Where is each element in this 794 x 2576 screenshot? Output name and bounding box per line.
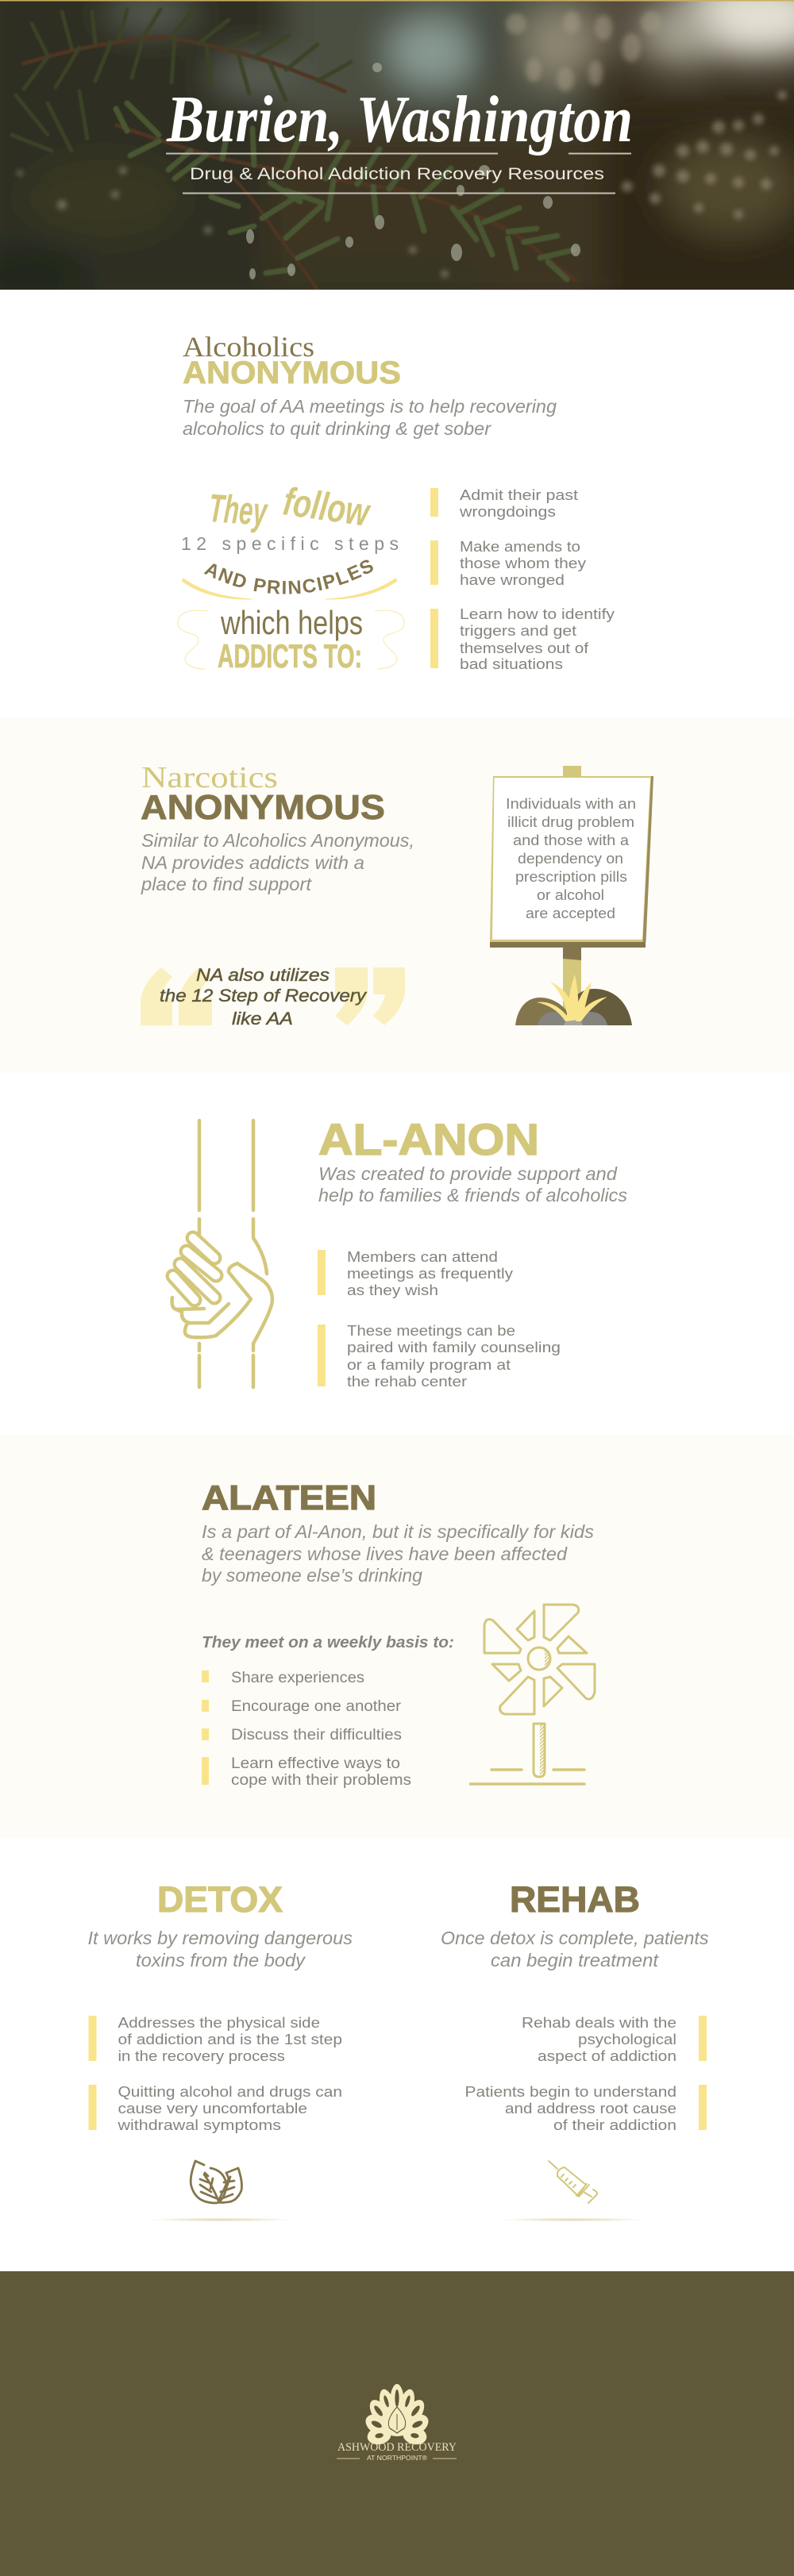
panel: al-anon (172, 1114, 627, 1390)
item text: These meetings can be (347, 1322, 515, 1339)
item text: of addiction and is the 1st step (118, 2031, 342, 2047)
heading: rehab: REHAB (510, 1879, 640, 1920)
subtitle: Drug & Alcohol Addiction Recovery Resources (190, 165, 604, 183)
icon: lotus (364, 2384, 430, 2446)
item text: Members can attend (347, 1248, 498, 1265)
heading: narcotics anonymous (141, 761, 385, 827)
intro text: place to find support (141, 874, 313, 894)
heading: alcoholics anonymous: Alcoholics (183, 331, 314, 363)
intro text (318, 1163, 627, 1205)
item text (465, 2014, 676, 2133)
item text: Encourage one another (231, 1698, 402, 1715)
bar markers (699, 2016, 707, 2130)
item text: aspect of addiction (538, 2047, 676, 2064)
sign text: and those with a (513, 832, 630, 848)
sign board (490, 776, 653, 942)
grass (537, 975, 607, 1021)
sign text: Individuals with an (506, 795, 636, 812)
quote marks (141, 967, 405, 1025)
bar markers (430, 488, 438, 668)
heading: alcoholics anonymous (183, 331, 401, 390)
item text: Share experiences (231, 1670, 364, 1686)
item text: meetings as frequently (347, 1265, 514, 1282)
squiggle brackets (178, 610, 404, 669)
wordmark: ASHWOOD RECOVERY (337, 2441, 457, 2454)
heading: alcoholics anonymous: ANONYMOUS (183, 356, 401, 390)
section background: footer (0, 2271, 794, 2576)
intro text (183, 396, 557, 439)
item text: of their addiction (553, 2117, 676, 2133)
sign text: dependency on (518, 850, 623, 867)
item text: Rehab deals with the (522, 2014, 676, 2031)
header background photo (0, 0, 794, 317)
icon shadow (148, 2217, 295, 2222)
item text (231, 1670, 411, 1789)
bar markers (89, 2016, 97, 2130)
intro text (202, 1521, 595, 1586)
item text: have wronged (460, 571, 565, 588)
lower hand (185, 1263, 272, 1351)
script words (207, 479, 374, 535)
intro text: alcoholics to quit drinking & get sober (183, 418, 491, 439)
curved text (203, 568, 378, 594)
intro text: Similar to Alcoholics Anonymous, (141, 830, 414, 851)
pinwheel blades (544, 1605, 579, 1640)
icon: syringe (549, 2161, 597, 2203)
list: what members do (430, 486, 615, 672)
item text: Learn how to identify (460, 606, 615, 622)
sign text: prescription pills (515, 868, 627, 885)
heading: narcotics anonymous: Narcotics (141, 761, 278, 794)
pinwheel stem (534, 1724, 545, 1777)
item text: bad situations (460, 656, 563, 672)
item text (117, 2014, 342, 2133)
mounds (515, 998, 573, 1025)
subheading: They meet on a weekly basis to: (202, 1634, 454, 1651)
callout: quote (141, 965, 405, 1028)
script words: They (207, 486, 269, 534)
smile swoosh (182, 579, 397, 599)
list: meeting facts (318, 1248, 561, 1390)
sign text (506, 795, 636, 921)
bar markers (202, 1671, 209, 1785)
item text: psychological (578, 2031, 676, 2047)
intro text: NA provides addicts with a (141, 852, 364, 873)
section background: al-anon (0, 1073, 794, 1435)
sign text: illicit drug problem (507, 813, 634, 830)
water droplets (246, 63, 580, 279)
intro text: can begin treatment (491, 1950, 660, 1970)
item text: Make amends to (460, 538, 580, 555)
intro text (441, 1928, 709, 1970)
item text: themselves out of (460, 640, 589, 656)
section background: alateen (0, 1435, 794, 1838)
header: photo banner with title (0, 0, 794, 317)
item text: those whom they (460, 555, 587, 571)
intro text (141, 830, 414, 894)
intro text (87, 1928, 353, 1970)
sign text: or alcohol (537, 886, 604, 903)
quote text: NA also utilizes (196, 965, 330, 985)
item text: and address root cause (505, 2100, 676, 2117)
heading: alateen: ALATEEN (202, 1478, 376, 1517)
footer logo: ashwood recovery (337, 2384, 457, 2462)
heading: al-anon: AL-ANON (318, 1114, 539, 1164)
script words: follow (280, 479, 374, 535)
title rule (166, 154, 631, 194)
divider (396, 1885, 399, 2131)
item text: wrongdoings (459, 503, 556, 520)
branches (12, 8, 576, 290)
rocks (538, 1012, 572, 1025)
icon shadow (499, 2217, 647, 2222)
intro text: & teenagers whose lives have been affected (202, 1544, 568, 1564)
list: weekly goals (202, 1670, 411, 1789)
heading: detox: DETOX (157, 1879, 283, 1920)
item text: Learn effective ways to (231, 1755, 400, 1772)
item text: withdrawal symptoms (117, 2117, 281, 2133)
intro text: Once detox is complete, patients (441, 1928, 709, 1948)
ground lines (470, 1770, 584, 1784)
panel: detox and rehab (87, 1879, 709, 2222)
post (563, 766, 581, 1025)
gripping fingers (173, 1238, 216, 1300)
panel: narcotics anonymous (141, 761, 653, 1028)
bar markers (318, 1250, 326, 1386)
item text: as they wish (347, 1282, 438, 1298)
quote text: the 12 Step of Recovery (160, 986, 368, 1005)
quote text: like AA (232, 1009, 293, 1028)
intro text: help to families & friends of alcoholics (318, 1185, 627, 1205)
item text: triggers and get (460, 622, 576, 639)
item text (347, 1248, 561, 1390)
column: rehab (441, 1879, 709, 2222)
gold top edge (0, 0, 794, 2)
panel: alateen (202, 1478, 595, 1789)
illustration: pinwheel (470, 1605, 595, 1784)
illustration: helping hands (172, 1121, 272, 1387)
which helps addicts to: which helps (220, 604, 363, 641)
main title: Burien, Washington (166, 83, 633, 156)
item text: or a family program at (347, 1356, 511, 1373)
section background: alcoholics anonymous (0, 290, 794, 717)
intro text: It works by removing dangerous (87, 1928, 353, 1948)
typographic lockup: they follow 12 specific steps (178, 479, 405, 675)
section background: detox and rehab (0, 1838, 794, 2271)
panel: alcoholics anonymous (178, 331, 615, 675)
sign text: are accepted (526, 905, 615, 921)
intro text: Is a part of Al-Anon, but it is specifically for kids (202, 1521, 595, 1542)
item text: Addresses the physical side (118, 2014, 320, 2031)
typographic lockup: they follow 12 specific steps: ADDICTS TO: (218, 637, 362, 675)
item text: in the recovery process (118, 2047, 285, 2064)
item text: Quitting alcohol and drugs can (118, 2083, 342, 2100)
item text: cause very uncomfortable (118, 2100, 307, 2117)
intro text: The goal of AA meetings is to help recovering (183, 396, 557, 417)
rope lines (199, 1121, 267, 1387)
item text: Patients begin to understand (465, 2083, 676, 2100)
pinwheel hub (528, 1647, 550, 1670)
intro text: Was created to provide support and (318, 1163, 618, 1184)
intro text: toxins from the body (136, 1950, 306, 1970)
lotus leaf cutouts (371, 2390, 423, 2439)
illustration: sign post (490, 766, 653, 1025)
item text: Discuss their difficulties (231, 1727, 402, 1744)
heading: narcotics anonymous: ANONYMOUS (141, 788, 385, 827)
item text: the rehab center (347, 1373, 467, 1390)
typographic lockup: they follow 12 specific steps: AND PRINCIPLES (203, 560, 373, 594)
tagline: AT NORTHPOINT® (367, 2454, 428, 2462)
intro text: by someone else’s drinking (202, 1565, 422, 1586)
item text (459, 486, 615, 672)
item text: Admit their past (460, 486, 578, 503)
quote text (160, 965, 368, 1028)
steps line: 12 specific steps (181, 533, 399, 554)
item text: paired with family counseling (347, 1339, 561, 1355)
section background: narcotics anonymous (0, 717, 794, 1073)
column: detox (87, 1879, 353, 2222)
item text: cope with their problems (231, 1772, 411, 1789)
icon: leaves (191, 2161, 241, 2203)
